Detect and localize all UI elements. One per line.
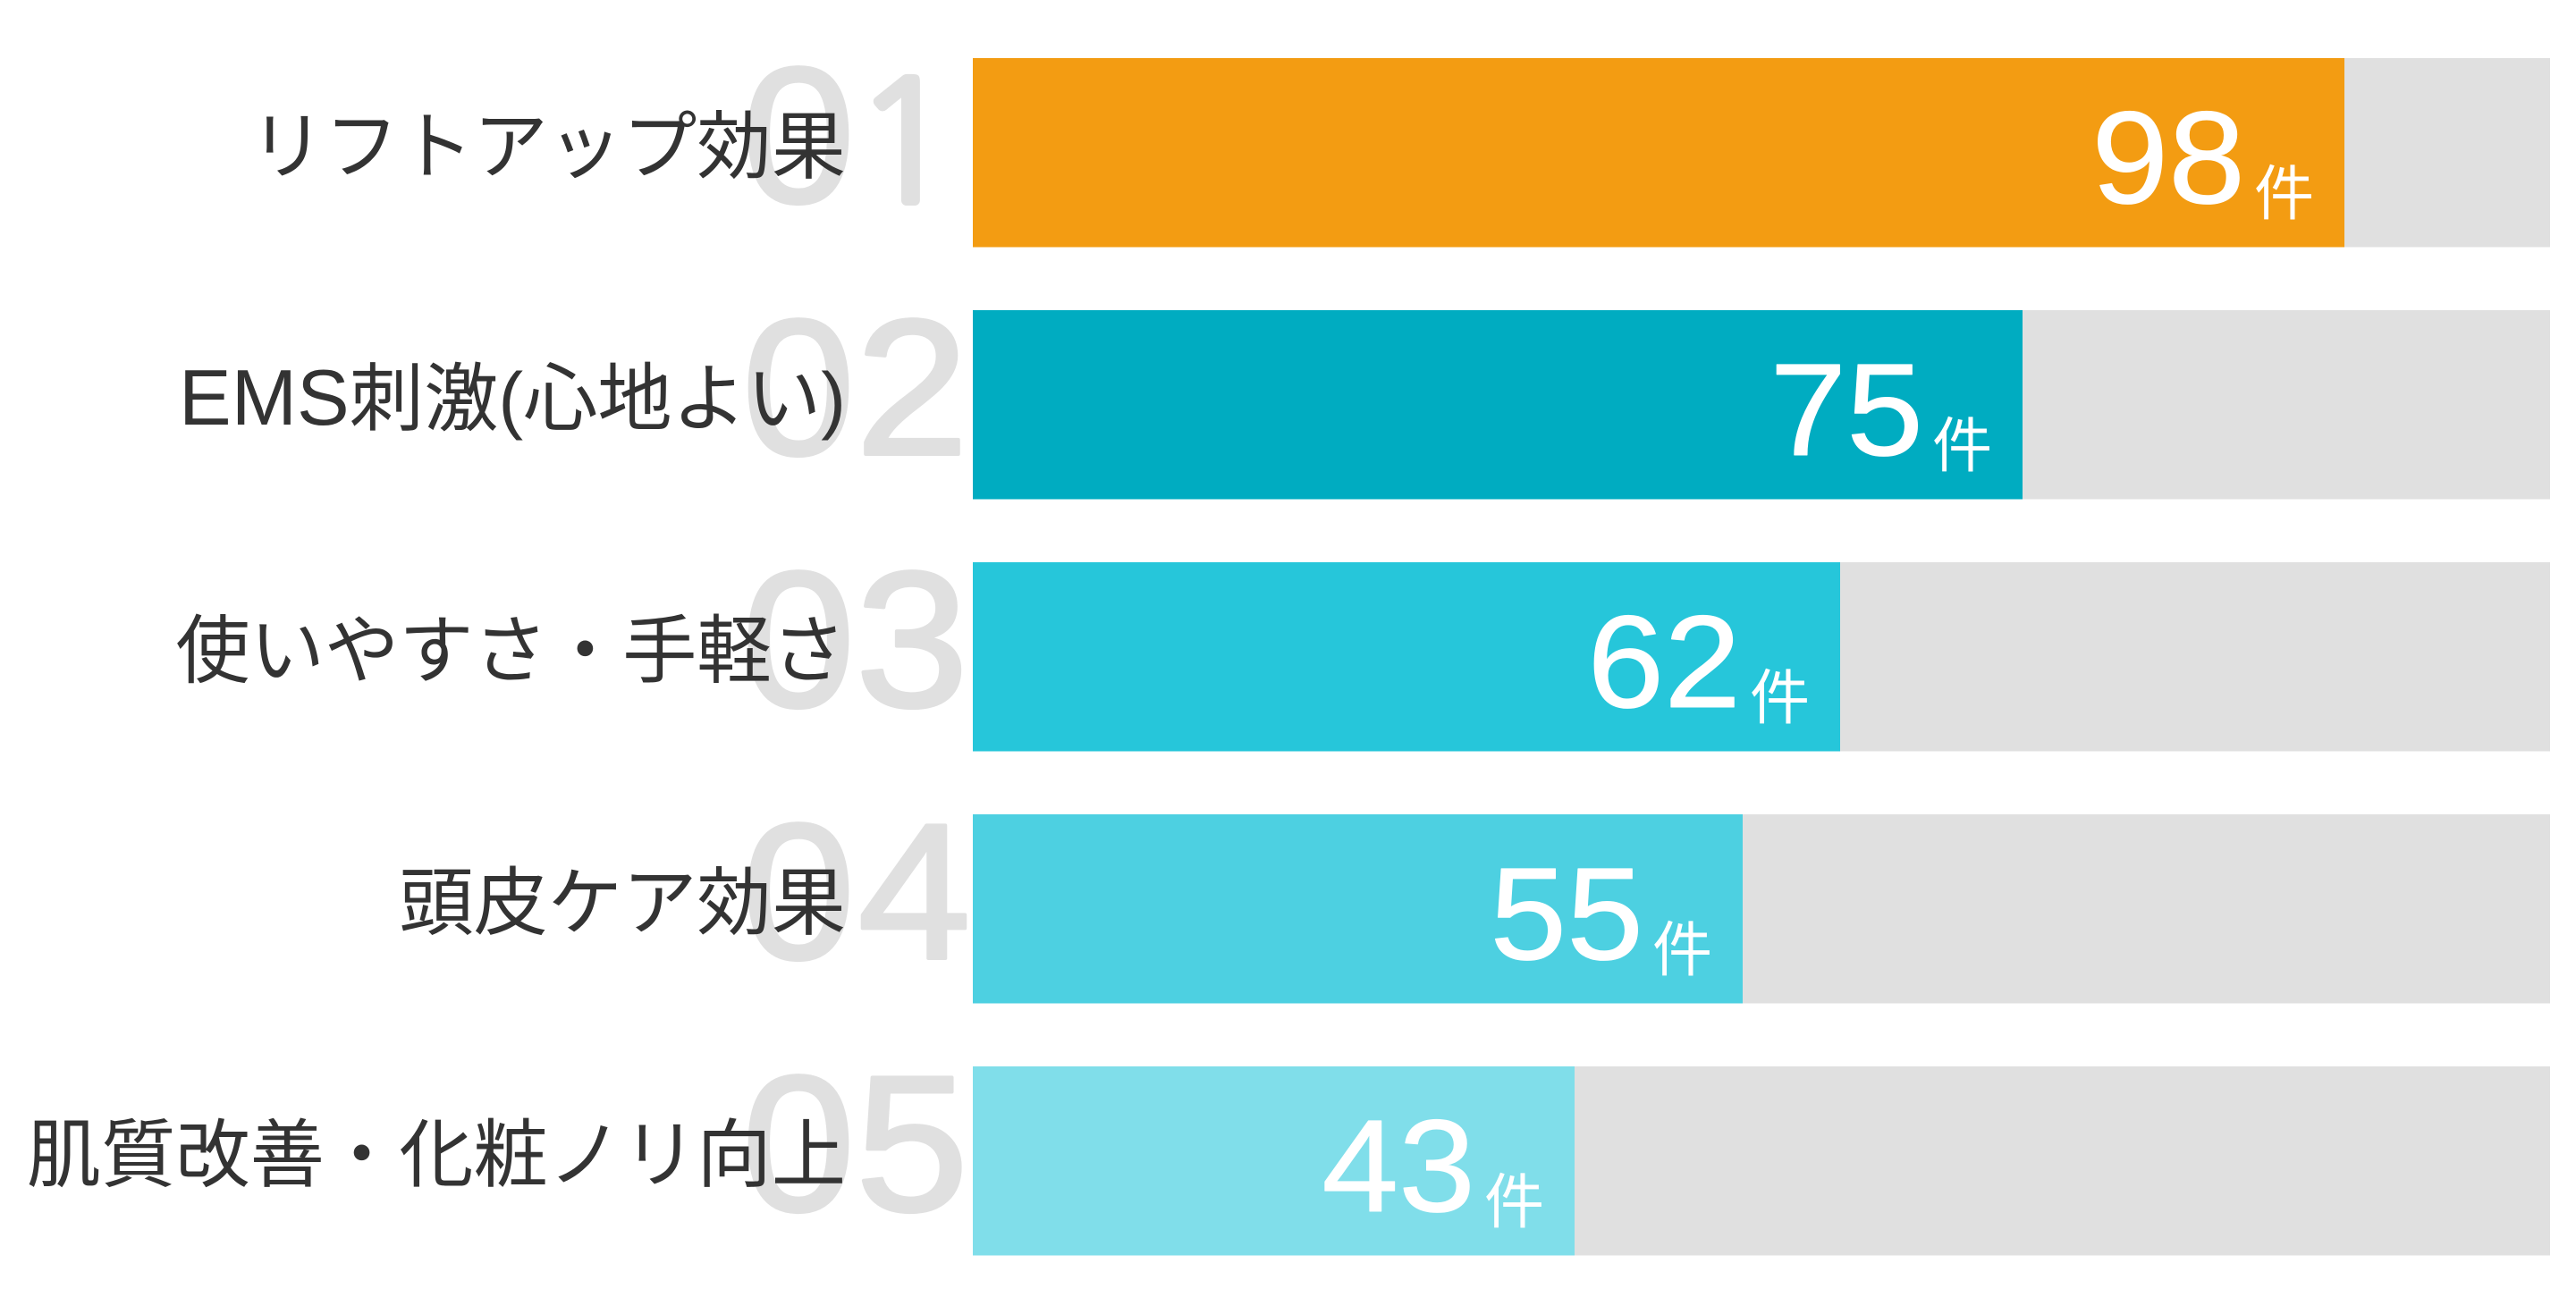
- unit: 件: [1484, 1169, 1544, 1236]
- rank number 04: 0: [742, 784, 855, 999]
- label: lift-up effect: リフトアップ効果: [250, 105, 846, 189]
- bar track: [973, 58, 2550, 247]
- bar value 98: [973, 58, 2344, 247]
- rank number 02: 2: [856, 280, 968, 495]
- bar value 75: [973, 310, 2023, 499]
- row 3: ease of use: [175, 532, 2550, 751]
- value 75: 75: [1769, 336, 1923, 483]
- row 2: EMS stimulation: [179, 280, 2550, 499]
- bar track: [973, 310, 2550, 499]
- row 5: skin quality and makeup: [27, 1036, 2550, 1255]
- unit: 件: [2254, 161, 2314, 228]
- value 98: 98: [2091, 84, 2245, 231]
- value 55: 55: [1490, 840, 1643, 987]
- label: scalp care effect: 頭皮ケア効果: [399, 862, 846, 945]
- label: EMS stimulation: EMS刺激(心地よい): [179, 353, 846, 442]
- rank number 05: 5: [856, 1036, 968, 1251]
- bar track: [973, 814, 2550, 1003]
- rank number 04: 4: [858, 784, 971, 999]
- rank number 05: 0: [742, 1036, 855, 1251]
- unit: 件: [1652, 917, 1712, 984]
- bar value 43: [973, 1066, 1575, 1255]
- bar value 62: [973, 562, 1840, 751]
- label: skin quality and makeup: 肌質改善・化粧ノリ向上: [27, 1114, 846, 1197]
- label: ease of use: 使いやすさ・手軽さ: [175, 610, 846, 693]
- bar track: [973, 562, 2550, 751]
- rank number 02: 0: [742, 280, 855, 495]
- value 43: 43: [1322, 1092, 1475, 1239]
- unit: 件: [1750, 665, 1810, 732]
- rank number 03: 0: [742, 532, 855, 747]
- bar track: [973, 1066, 2550, 1255]
- bar value 55: [973, 814, 1743, 1003]
- rank number 01: 1: [851, 58, 959, 226]
- value 62: 62: [1587, 588, 1741, 735]
- row 4: scalp care effect: [399, 784, 2550, 1003]
- rank number 03: 3: [856, 532, 968, 747]
- rank number 01: 0: [742, 28, 855, 243]
- row 1: lift-up effect: [250, 28, 2550, 248]
- unit: 件: [1932, 413, 1992, 480]
